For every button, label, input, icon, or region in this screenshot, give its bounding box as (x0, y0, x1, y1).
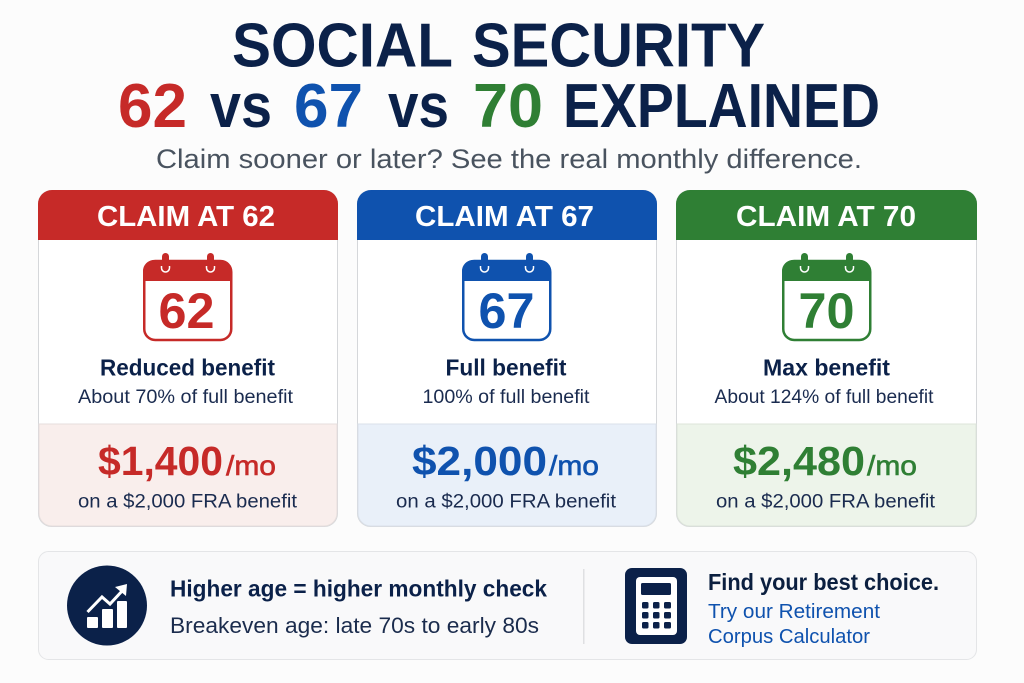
amount box (39, 424, 337, 526)
message text: Breakeven age: late 70s to early 80s (170, 613, 539, 638)
amount box: $1,400 (98, 438, 223, 484)
panel: claim at 70 (676, 190, 977, 526)
message text: Higher age = higher monthly check (170, 576, 548, 602)
title: EXPLAINED (563, 72, 880, 141)
header: claim at 67: CLAIM AT 67 (415, 201, 594, 233)
header: claim at 67 (357, 190, 657, 240)
amount box: $2,480 (733, 438, 865, 484)
amount box: /mo (549, 450, 599, 481)
title: 70 (473, 72, 543, 141)
call to action: Corpus Calculator (708, 625, 870, 648)
header: claim at 70: CLAIM AT 70 (736, 201, 916, 233)
header: claim at 62: CLAIM AT 62 (97, 201, 275, 233)
title: SECURITY (472, 12, 765, 80)
message text (170, 576, 548, 638)
amount box: on a $2,000 FRA benefit (396, 492, 617, 512)
title: 62 (118, 72, 187, 141)
call to action: Try our Retirement (708, 600, 880, 623)
benefit percent: About 70% of full benefit (78, 387, 294, 408)
amount box: /mo (226, 450, 276, 481)
icon: calendar 62: 62 (158, 283, 214, 339)
amount box (677, 424, 976, 526)
title (118, 12, 880, 141)
benefit label: Reduced benefit (100, 354, 275, 380)
panel: bottom bar (38, 552, 976, 660)
title: SOCIAL (232, 12, 453, 80)
amount box: on a $2,000 FRA benefit (716, 492, 936, 512)
amount box (358, 424, 656, 526)
panel: claim at 67 (357, 190, 657, 526)
header: claim at 70 (676, 190, 977, 240)
panel: claim at 62 (38, 190, 338, 526)
icon: calendar 67 (462, 253, 551, 340)
title: vs (388, 72, 449, 141)
call to action: Find your best choice. (708, 569, 939, 595)
icon: calendar 70: 70 (798, 283, 854, 339)
icon: calculator (625, 568, 687, 644)
benefit percent: About 124% of full benefit (714, 387, 934, 408)
title: vs (210, 72, 272, 141)
amount box: /mo (867, 450, 917, 481)
benefit label: Full benefit (446, 354, 567, 380)
amount box: $2,000 (412, 438, 547, 484)
icon: growth chart (67, 566, 147, 646)
icon: calendar 67: 67 (478, 283, 534, 339)
subtitle: Claim sooner or later? See the real monthly difference. (156, 144, 862, 174)
icon: calendar 70 (782, 253, 871, 340)
icon: calendar 62 (143, 253, 232, 340)
benefit percent: 100% of full benefit (422, 387, 590, 408)
call to action (708, 569, 939, 648)
benefit label: Max benefit (763, 354, 890, 380)
header: claim at 62 (38, 190, 338, 240)
title: 67 (294, 72, 363, 141)
amount box: on a $2,000 FRA benefit (78, 492, 298, 512)
